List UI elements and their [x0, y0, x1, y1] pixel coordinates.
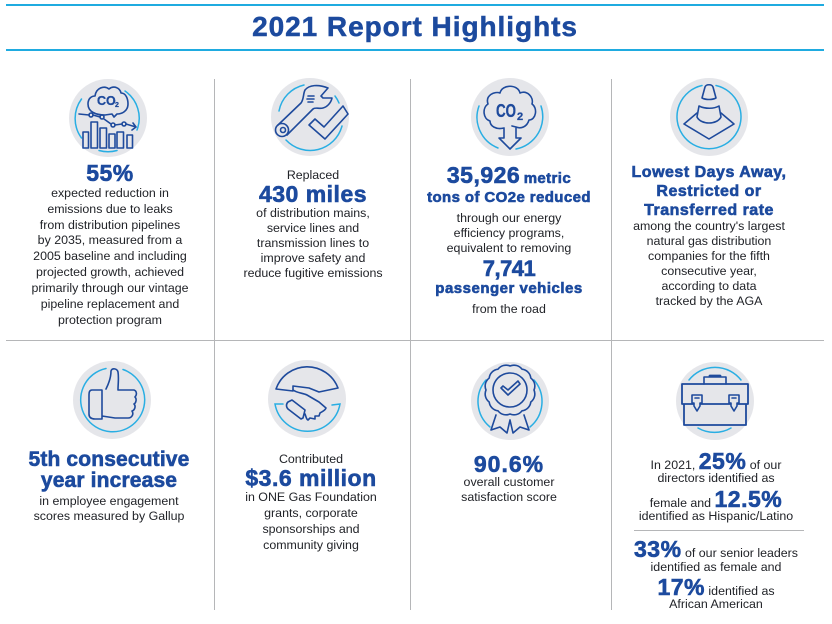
- icon: wrench and check: [271, 78, 349, 156]
- statistic and description: year increase: [41, 469, 177, 492]
- statistic and description: [31, 160, 189, 327]
- statistic and description: protection program: [58, 313, 162, 327]
- statistics and description: 7,741: [483, 256, 535, 281]
- statistic and description: in employee engagement: [39, 494, 179, 508]
- statistic and description: transmission lines to: [257, 236, 369, 250]
- statistic and description: primarily through our vintage: [31, 281, 189, 295]
- statistics and description: African American: [669, 597, 763, 611]
- statistics and description: through our energy: [457, 211, 561, 225]
- icon: CO2 cloud with arrow: 2: [517, 111, 523, 123]
- statistics and description: identified as female and: [651, 560, 781, 574]
- icon: award rosette: [471, 362, 549, 440]
- title: 2021 Report Highlights: [252, 11, 578, 42]
- icon: thumbs up: [73, 361, 151, 439]
- statistic and description: emissions due to leaks: [47, 202, 173, 216]
- statistic and description: $3.6 million: [245, 465, 377, 491]
- heading and description: natural gas distribution: [647, 234, 771, 248]
- statistics and description: from the road: [472, 302, 546, 316]
- heading and description: Transferred rate: [644, 202, 774, 219]
- panel: employee engagement: [28, 361, 189, 523]
- heading and description: consecutive year,: [661, 264, 757, 278]
- icon: handshake: [268, 360, 346, 438]
- statistic and description: 5th consecutive: [28, 448, 189, 471]
- statistics and description: female and 12.5%: [650, 486, 782, 512]
- statistics and description: tons of CO2e reduced: [427, 189, 591, 206]
- statistics and description: In 2021, 25% of our: [651, 448, 781, 474]
- statistic and description: Replaced: [287, 168, 339, 182]
- panel: customer satisfaction: [461, 362, 557, 504]
- icon: traffic cone: [670, 78, 748, 156]
- panel: CO2e reduced: [427, 78, 591, 316]
- statistic and description: [243, 168, 383, 280]
- icon: briefcase: [676, 362, 754, 440]
- statistics and description: efficiency programs,: [454, 226, 564, 240]
- statistics and description: [427, 162, 591, 316]
- heading and description: Restricted or: [656, 183, 762, 200]
- panel: emissions reduction: [31, 79, 189, 327]
- heading and description: [632, 164, 786, 308]
- statistics and description: 17% identified as: [657, 574, 775, 600]
- statistic and description: scores measured by Gallup: [34, 509, 184, 523]
- statistic and description: 430 miles: [259, 181, 367, 207]
- statistic and description: pipeline replacement and: [41, 297, 179, 311]
- heading and description: companies for the fifth: [648, 249, 770, 263]
- panel: lowest DART rate: [632, 78, 786, 308]
- statistic and description: [461, 451, 557, 504]
- statistic and description: sponsorships and: [262, 522, 360, 536]
- statistic and description: Contributed: [279, 452, 343, 466]
- heading and description: according to data: [661, 279, 757, 293]
- statistic and description: service lines and: [267, 221, 359, 235]
- statistic and description: satisfaction score: [461, 490, 557, 504]
- icon: CO2 cloud with arrow: [471, 78, 549, 156]
- statistics and description: directors identified as: [657, 471, 775, 485]
- icon: CO2 falling chart: 2: [115, 102, 119, 109]
- heading and description: among the country's largest: [633, 219, 785, 233]
- statistic and description: [28, 448, 189, 523]
- statistic and description: in ONE Gas Foundation: [245, 490, 377, 504]
- statistic and description: expected reduction in: [51, 186, 169, 200]
- statistics and description: 33% of our senior leaders: [634, 536, 798, 562]
- statistic and description: overall customer: [464, 475, 554, 489]
- statistic and description: 2005 baseline and including: [33, 249, 187, 263]
- statistic and description: projected growth, achieved: [36, 265, 184, 279]
- panel: miles replaced: [243, 78, 383, 280]
- statistic and description: 90.6%: [474, 451, 544, 477]
- statistics and description: equivalent to removing: [447, 241, 571, 255]
- statistics and description: [634, 448, 804, 611]
- panel: community giving: [245, 360, 377, 552]
- statistics and description: passenger vehicles: [435, 280, 583, 297]
- statistics and description: 35,926 metric: [447, 162, 571, 188]
- statistic and description: improve safety and: [261, 251, 365, 265]
- icon: CO2 falling chart: CO: [97, 94, 116, 108]
- statistics and description: identified as Hispanic/Latino: [639, 509, 793, 523]
- statistic and description: by 2035, measured from a: [38, 233, 182, 247]
- panel: leadership diversity: [634, 362, 804, 611]
- statistic and description: from distribution pipelines: [40, 218, 180, 232]
- statistic and description: grants, corporate: [264, 506, 358, 520]
- icon: CO2 falling chart: [69, 79, 147, 157]
- icon: CO2 cloud with arrow: CO: [496, 101, 516, 121]
- statistic and description: reduce fugitive emissions: [243, 266, 383, 280]
- statistic and description: [245, 452, 377, 552]
- heading and description: tracked by the AGA: [656, 294, 762, 308]
- statistic and description: of distribution mains,: [256, 206, 370, 220]
- heading and description: Lowest Days Away,: [632, 164, 786, 181]
- statistic and description: 55%: [86, 160, 134, 186]
- statistic and description: community giving: [263, 538, 359, 552]
